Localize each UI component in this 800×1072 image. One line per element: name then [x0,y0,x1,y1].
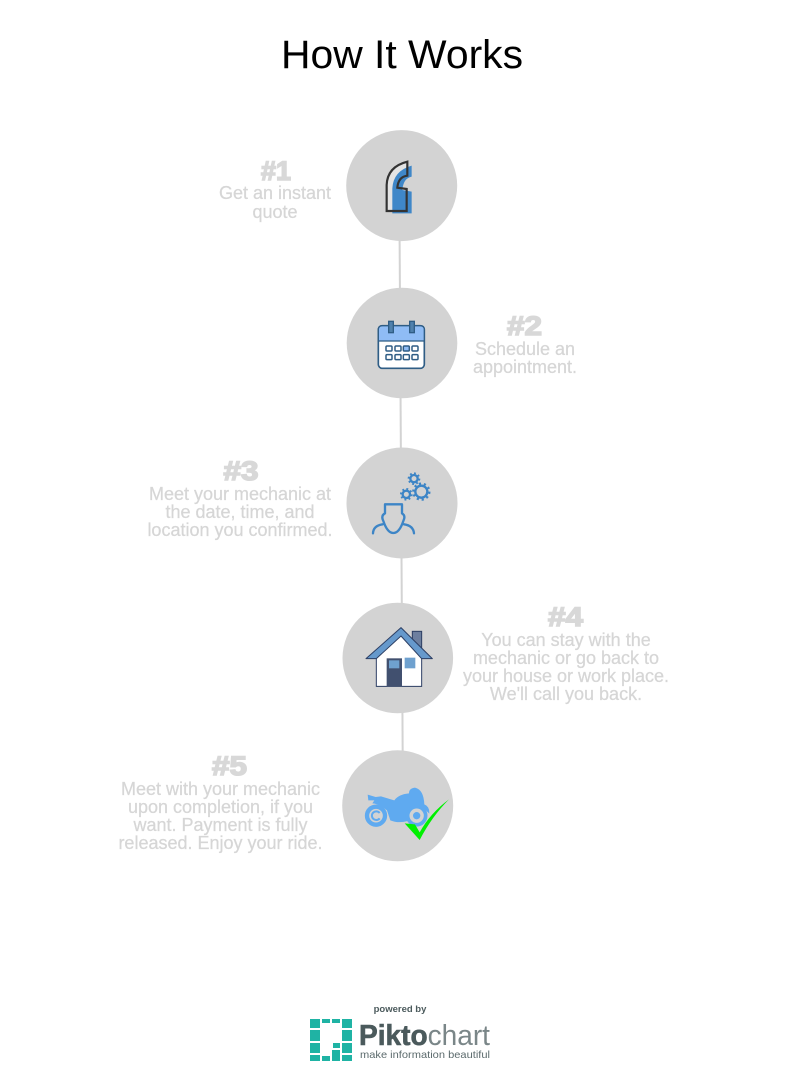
step 4 text: You can stay with the [481,630,651,650]
step 1 [219,130,457,241]
step 1 circle [346,130,457,241]
powered by label: powered by [374,1004,427,1015]
step 3 text: Meet your mechanic at [149,484,331,504]
step 5 text: Meet with your mechanic [121,779,320,799]
step 1 text: quote [252,202,298,222]
step 4 circle [342,603,453,713]
step 4 text: your house or work place. [463,666,669,686]
icon: mechanic with gears [373,473,429,533]
step 5 text: want. Payment is fully [132,815,308,835]
step 2 text: appointment. [473,357,577,377]
step 4 text: We'll call you back. [490,684,642,704]
step 3 text: location you confirmed. [147,520,333,540]
check mark [405,799,449,840]
icon: phone handset [387,162,412,213]
step 3 number: #3 [224,456,258,486]
step 3 text: the date, time, and [165,502,315,522]
icon: calendar [378,321,424,368]
step 2 [347,288,577,398]
timeline connector [399,186,403,806]
icon: house [366,628,432,686]
step 1 text: Get an instant [219,183,331,203]
step 5 circle [342,750,453,861]
logo tagline: make information beautiful [360,1049,490,1061]
step 2 text: Schedule an [475,339,575,359]
step 1 number: #1 [261,156,291,186]
step 5 number: #5 [212,751,247,781]
footer: Piktochart logo [310,1004,490,1061]
icon: motorcycle with check mark [367,788,449,840]
step 2 circle [347,288,457,398]
step 5 [118,750,453,861]
step 4 [342,602,669,713]
step 4 number: #4 [548,602,583,632]
step 2 number: #2 [507,311,542,341]
logo mark [310,1019,352,1061]
logo wordmark: Piktochart [359,1020,490,1052]
step 3 [147,448,458,558]
step 3 circle [346,448,458,558]
step 5 text: upon completion, if you [128,797,313,817]
step 4 text: mechanic or go back to [473,648,659,668]
step 5 text: released. Enjoy your ride. [118,833,323,853]
title: How It Works [281,33,523,77]
